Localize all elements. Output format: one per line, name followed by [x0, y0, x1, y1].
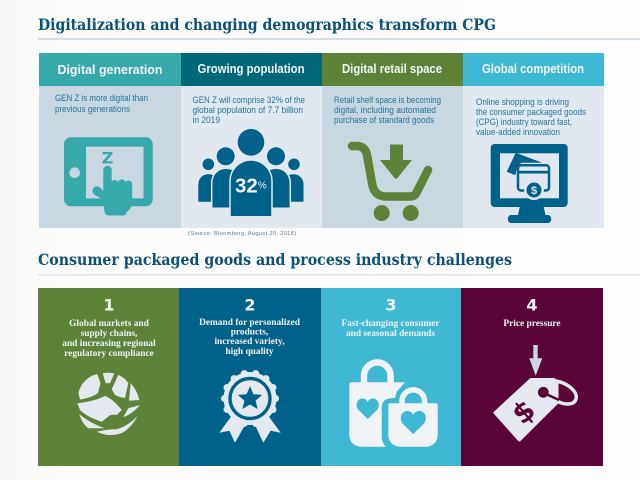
panel: challenge 1: [38, 288, 179, 466]
text: challenge 2 description: [199, 318, 301, 357]
panel: challenge 2: [179, 288, 321, 466]
text: challenge 2 description: high quality: [225, 347, 274, 357]
icon: group of people with 32%: %: [258, 181, 267, 192]
text: global competition description: (CPG) industry toward fast,: [476, 117, 572, 127]
text: challenge 1 description: regulatory compliance: [64, 349, 154, 359]
panel: growing population: [181, 53, 322, 237]
panel: global competition: [463, 53, 604, 228]
icon: monitor with payment card: [491, 144, 568, 223]
text: digital generation description: [55, 93, 148, 114]
text: challenge 2 description: Demand for personalized: [199, 318, 301, 328]
panel: digital retail space: [322, 53, 463, 228]
panel: digital generation: [39, 53, 181, 228]
text: challenge 1 description: and increasing regional: [62, 339, 156, 349]
icon: shopping bags with hearts: [349, 362, 438, 447]
text: digital retail space description: purchase of standard goods: [334, 115, 434, 125]
title: top heading: Digitalization and changing demographics transform CPG: [38, 15, 496, 34]
text: challenge 2 description: products,: [231, 328, 268, 338]
text: growing population description: GEN Z will comprise 32% of the: [192, 95, 305, 105]
text: challenge 3 description: and seasonal demands: [346, 329, 435, 339]
text: digital generation description: previous generations: [55, 104, 130, 114]
text: source: (Source: Bloomberg, August 20, 2018): [188, 231, 296, 237]
text: challenge 4 description: Price pressure: [503, 319, 561, 329]
text: digital retail space description: [334, 95, 441, 125]
text: challenge 1 description: supply chains,: [81, 329, 137, 339]
text: digital retail space description: digital, including automated: [334, 105, 436, 115]
icon: shopping cart: [352, 144, 428, 221]
text: challenge 1 description: Global markets and: [69, 319, 150, 329]
text: global competition description: value-added innovation: [476, 127, 560, 137]
text: digital generation description: GEN Z is more digital than: [55, 93, 148, 103]
text: growing population description: [192, 95, 305, 125]
icon: price tag: [495, 380, 576, 440]
heading: growing population: Growing population: [198, 61, 305, 76]
number 2: 2: [244, 296, 256, 315]
panel: challenge 4: [461, 288, 603, 466]
number 3: 3: [385, 296, 397, 315]
text: growing population description: global population of 7.7 billion: [192, 105, 303, 115]
text: global competition description: the consumer packaged goods: [476, 107, 586, 117]
icon: group of people with 32%: 32: [235, 175, 258, 198]
icon: tablet with pointing hand: Z: [102, 148, 113, 168]
text: challenge 2 description: increased variety,: [214, 337, 285, 347]
text: challenge 1 description: [62, 319, 156, 359]
icon: price tag: $: [506, 393, 542, 431]
heading: digital retail space: Digital retail space: [342, 61, 442, 76]
text: digital retail space description: Retail shelf space is becoming: [334, 95, 441, 105]
icon: monitor with payment card: $: [531, 185, 537, 197]
number 1: 1: [103, 296, 115, 315]
heading: digital generation: Digital generation: [58, 62, 163, 77]
icon: arrow down: [529, 345, 542, 376]
icon: connected globe: [77, 373, 140, 435]
text: global competition description: Online shopping is driving: [476, 97, 569, 107]
title: second heading: Consumer packaged goods and process industry challenges: [38, 250, 512, 269]
text: challenge 3 description: [341, 319, 440, 339]
icon: award rosette: [219, 370, 281, 443]
panel: challenge 3: [321, 288, 461, 466]
heading: global competition: Global competition: [482, 61, 584, 76]
icon: tablet with pointing hand: [64, 137, 153, 216]
number 4: 4: [526, 296, 538, 315]
text: global competition description: [476, 97, 586, 137]
icon: group of people with 32%: [198, 129, 304, 217]
text: growing population description: in 2019: [192, 115, 220, 125]
text: challenge 3 description: Fast-changing consumer: [341, 319, 440, 329]
